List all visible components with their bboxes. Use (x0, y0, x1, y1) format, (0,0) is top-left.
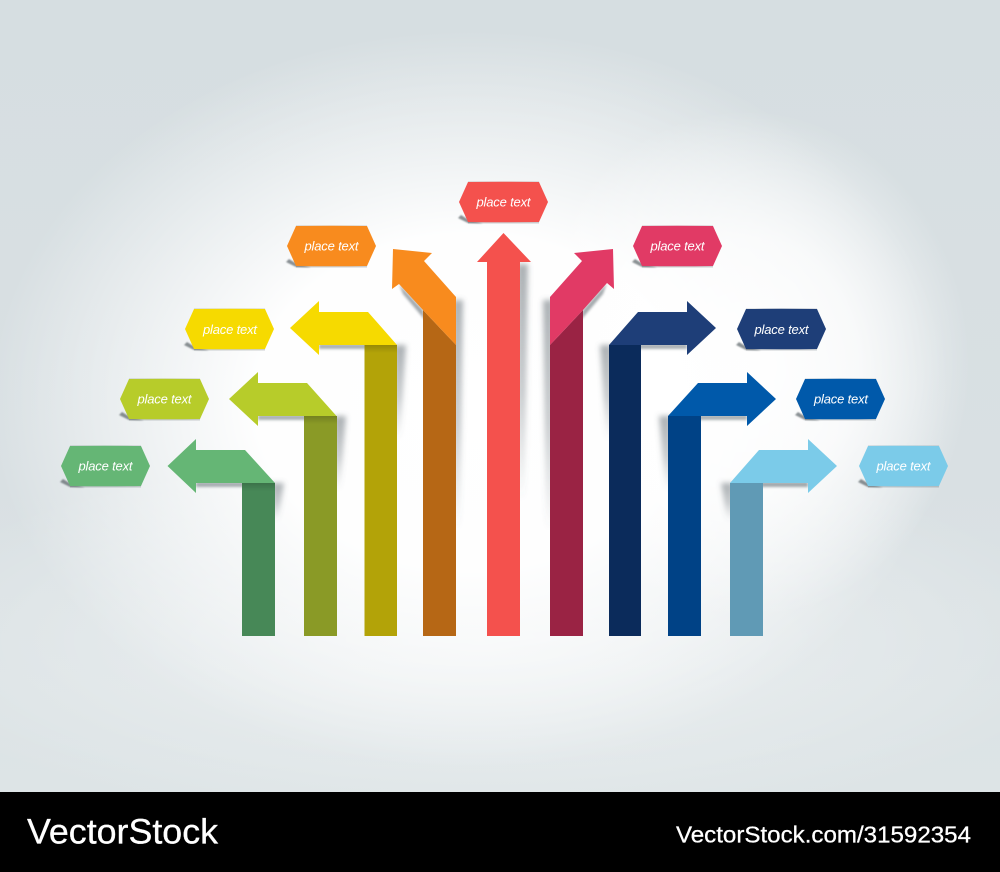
label: green: place text (78, 458, 134, 474)
arrow 1: green, pointing left (168, 439, 284, 636)
column and head (477, 233, 531, 636)
column (364, 345, 397, 636)
arrow head (668, 372, 776, 426)
arrow 2: olive, pointing left (229, 372, 346, 636)
label: green (60, 446, 150, 488)
label: orange (286, 226, 376, 268)
arrow 6: pink, pointing up-right (543, 249, 614, 636)
arrow head (168, 439, 275, 493)
arrow head (392, 249, 456, 345)
label: light blue: place text (876, 458, 932, 474)
label: orange: place text (304, 238, 360, 254)
watermark bar (0, 792, 1000, 872)
arrow head (229, 372, 336, 426)
column (668, 416, 701, 636)
arrow 4: orange, pointing up-left (392, 249, 463, 636)
label: blue: place text (813, 392, 869, 406)
label: red: place text (476, 194, 532, 210)
label: yellow (184, 308, 274, 350)
label: yellow: place text (202, 322, 258, 337)
arrow 8: blue, pointing right (659, 372, 776, 636)
label: pink: place text (650, 238, 706, 254)
arrow head (550, 249, 614, 345)
label: olive: place text (136, 392, 193, 406)
column (242, 483, 275, 636)
arrow 3: yellow, pointing left (290, 301, 406, 636)
label: light blue (858, 446, 948, 488)
arrow head (290, 301, 397, 355)
arrow head (609, 301, 716, 355)
label: pink (632, 226, 722, 268)
watermark logo text: VectorStock (27, 812, 219, 852)
arrow 9: light blue, pointing right (721, 439, 837, 636)
arrow 5: red, pointing up (477, 233, 531, 636)
arrow 7: navy, pointing right (600, 301, 716, 636)
watermark url text: VectorStock.com/31592354 (676, 822, 971, 848)
label: navy: place text (754, 322, 810, 337)
label: navy (736, 308, 826, 350)
label: blue (795, 378, 885, 420)
column (550, 310, 583, 636)
column (304, 416, 337, 636)
label: olive (119, 378, 209, 420)
column (730, 483, 763, 636)
label: red (458, 182, 548, 224)
arrow head (730, 439, 837, 493)
column (423, 310, 456, 636)
column (609, 345, 641, 636)
